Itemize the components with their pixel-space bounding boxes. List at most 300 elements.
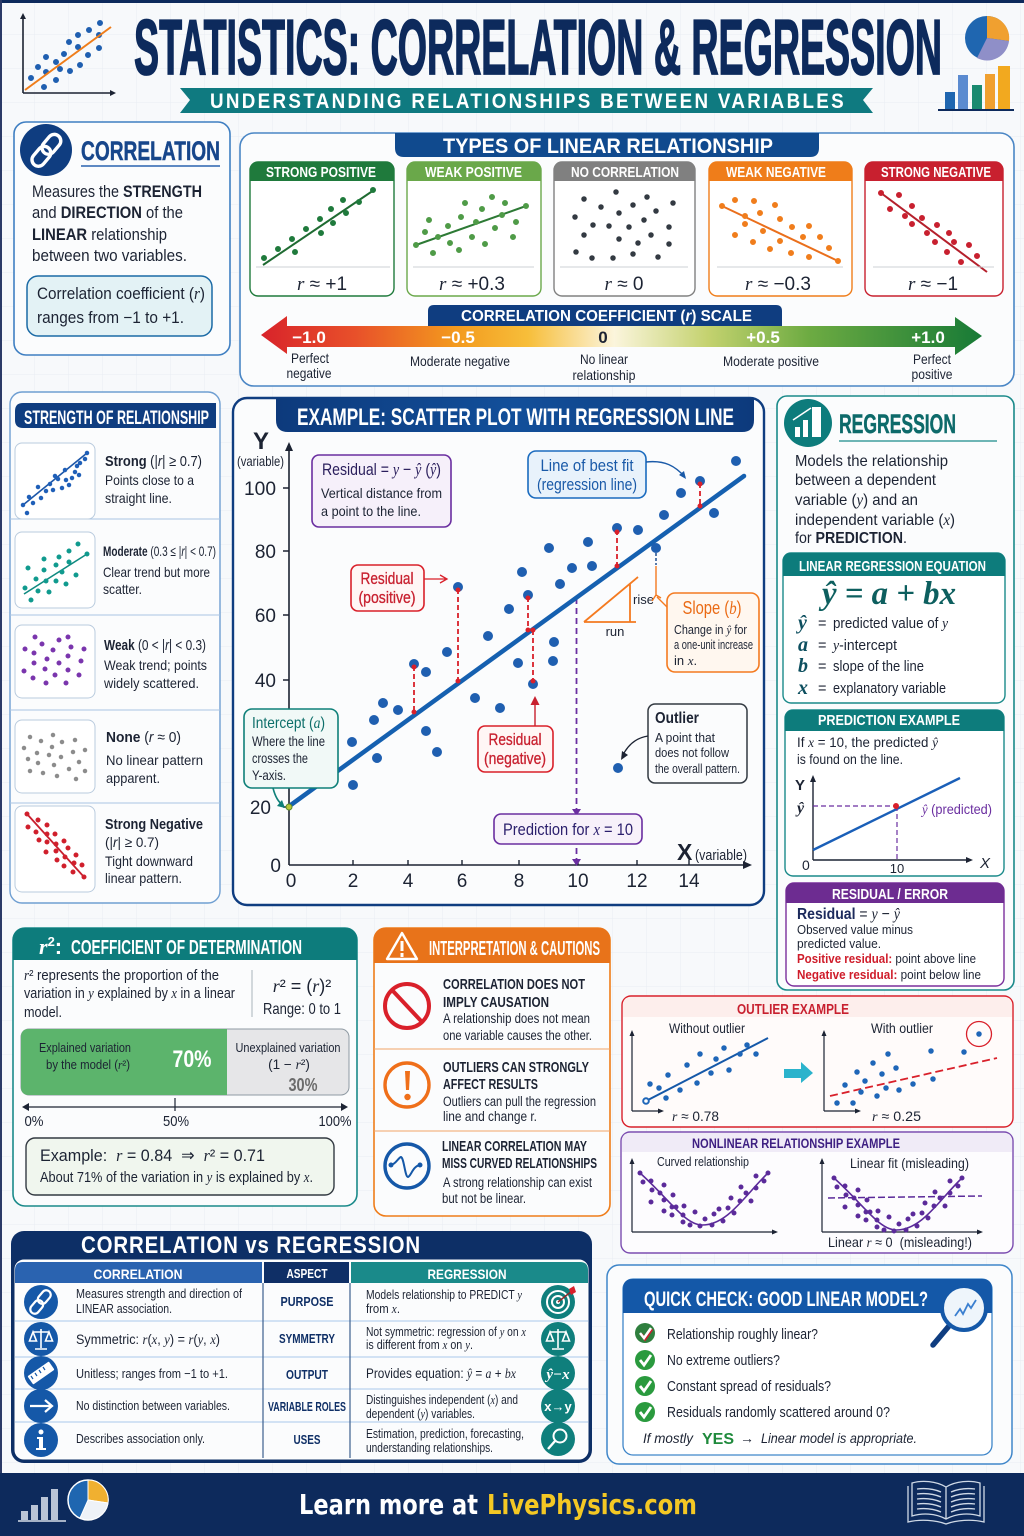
- card: weak negative: [709, 162, 852, 296]
- equation legend: =: [818, 659, 826, 675]
- heading: correlation vs regression: CORRELATION vs REGRESSION: [81, 1232, 421, 1259]
- callout: residual negative: [478, 696, 553, 772]
- table row: uses: [24, 1422, 575, 1457]
- chart axes: [237, 428, 752, 892]
- row: moderate: scatter.: [103, 581, 142, 597]
- chart axes: 14: [678, 871, 700, 892]
- mini prediction chart: [795, 775, 992, 876]
- chart: curved relationship: [630, 1154, 778, 1234]
- checklist: Relationship roughly linear?: [667, 1326, 818, 1343]
- conclusion line: YES: [702, 1431, 734, 1448]
- card: strong negative: r ≈ −1: [908, 274, 958, 295]
- callout: coefficient range: ranges from −1 to +1.: [37, 309, 184, 327]
- caution: outliers: Outliers can pull the regression: [443, 1094, 596, 1109]
- chart: curved relationship: Curved relationship: [657, 1154, 749, 1169]
- regression definition: [795, 453, 955, 547]
- row: weak: Weak trend; points: [104, 657, 207, 673]
- chart: without outlier: [630, 1021, 768, 1125]
- icon: open book: [908, 1481, 984, 1524]
- icon: magnifying glass: [933, 1286, 986, 1345]
- caution: outliers: OUTLIERS CAN STRONGLY: [443, 1059, 589, 1076]
- heading: types: TYPES OF LINEAR RELATIONSHIP: [443, 135, 773, 158]
- example box: [26, 1138, 334, 1195]
- mini prediction chart: ŷ (predicted): [920, 801, 992, 818]
- icon: arrow: [24, 1389, 58, 1423]
- card: strong positive: [250, 162, 394, 296]
- table row: uses: understanding relationships.: [366, 1441, 493, 1455]
- mini prediction chart: X: [979, 855, 991, 872]
- icon: header bar chart: [938, 66, 1014, 110]
- caution: causation: IMPLY CAUSATION: [443, 994, 549, 1011]
- checklist: Residuals randomly scattered around 0?: [667, 1404, 890, 1421]
- icon: ruler: [24, 1356, 58, 1390]
- correlation definition: LINEAR relationship: [32, 226, 167, 244]
- conclusion line: [643, 1430, 917, 1448]
- scale labels: Moderate positive: [723, 353, 819, 369]
- footer band: [0, 1473, 1024, 1536]
- footer call to action: LivePhysics.com: [487, 1488, 697, 1521]
- correlation definition: between two variables.: [32, 247, 187, 265]
- card: weak negative: WEAK NEGATIVE: [726, 165, 826, 181]
- heading: scatter plot: [276, 398, 754, 432]
- card: residual error: predicted value.: [797, 936, 881, 951]
- callout: outlier: A point that: [655, 730, 715, 745]
- callout: residual positive: (positive): [358, 588, 416, 607]
- heading: strength: STRENGTH OF RELATIONSHIP: [24, 408, 209, 429]
- chart axes: Y: [253, 428, 269, 455]
- row: none: None (r ≈ 0): [106, 729, 181, 746]
- r squared formula: r² = (r)²: [273, 976, 331, 996]
- heading: quick check: [623, 1279, 992, 1313]
- scale labels: positive: [912, 366, 953, 382]
- correlation scale arrow: +1.0: [911, 328, 945, 347]
- table row: variable roles: Distinguishes independent (x) and: [366, 1393, 518, 1407]
- icon: footer pie chart: [68, 1480, 108, 1520]
- heading: r squared: :: [55, 934, 62, 959]
- heading: r squared: 2: [48, 934, 55, 949]
- example box: About 71% of the variation in y is explained by x.: [40, 1169, 313, 1186]
- scale labels: negative: [286, 365, 332, 381]
- chart axes: (variable): [237, 453, 284, 469]
- slope triangle: rise: [633, 592, 654, 607]
- mini prediction chart: 0: [802, 857, 810, 873]
- caution: outliers: AFFECT RESULTS: [443, 1076, 538, 1093]
- r squared definition: r² represents the proportion of the: [24, 968, 219, 984]
- equation: ŷ = a + bx: [818, 576, 956, 612]
- callout: line of best fit: (regression line): [537, 475, 637, 494]
- table row: variable roles: No distinction between variables.: [76, 1398, 230, 1413]
- caution: causation: CORRELATION DOES NOT: [443, 976, 585, 993]
- panel: scatter plot example: [233, 398, 764, 905]
- callout: residual formula: a point to the line.: [321, 503, 421, 519]
- panel: quick check: [607, 1265, 1012, 1464]
- panel: outlier example: OUTLIER EXAMPLE: [737, 1002, 849, 1018]
- correlation scale arrow: −0.5: [441, 328, 475, 347]
- callout: residual formula: [312, 455, 451, 527]
- slope triangle: [584, 577, 654, 639]
- chart axes: 2: [348, 871, 358, 892]
- caution: causation: A relationship does not mean: [443, 1011, 590, 1026]
- correlation scale arrow: −1.0: [292, 328, 326, 347]
- arrow: without to with outlier: [784, 1062, 813, 1083]
- chart: with outlier: [822, 1021, 997, 1125]
- table row: purpose: Measures strength and direction of: [76, 1287, 242, 1301]
- icon: x to y: [541, 1389, 575, 1423]
- row: strong negative: (|r| ≥ 0.7): [105, 834, 159, 850]
- callout: residual negative: Residual: [488, 730, 542, 749]
- correlation definition: Measures the STRENGTH: [32, 183, 202, 201]
- chart axes: 60: [255, 606, 276, 627]
- mini prediction chart: 10: [890, 861, 904, 876]
- panel: outlier example: [622, 996, 1013, 1127]
- callout: slope: [652, 566, 759, 672]
- row: weak: [15, 625, 207, 698]
- equation legend: explanatory variable: [833, 681, 946, 697]
- row: weak: widely scattered.: [103, 675, 199, 691]
- stacked bar: explained vs unexplained: by the model (r²): [46, 1057, 130, 1072]
- subtitle ribbon: UNDERSTANDING RELATIONSHIPS BETWEEN VARIABLES: [210, 90, 846, 113]
- table row: variable roles: [24, 1389, 575, 1423]
- row: strong negative: linear pattern.: [105, 870, 182, 886]
- callout: line of best fit: [528, 451, 686, 498]
- residual lines: [414, 483, 700, 712]
- heading: coefficient scale: [428, 305, 782, 326]
- table row: output: OUTPUT: [286, 1368, 328, 1382]
- card: residual error: [786, 883, 1004, 986]
- table row: purpose: from x.: [366, 1302, 400, 1316]
- chart axes: 12: [626, 871, 648, 892]
- card: prediction example: [785, 710, 1004, 876]
- equation legend: a: [798, 634, 808, 656]
- panel: coefficient of determination: [13, 928, 357, 1206]
- caution: causation: one variable causes the other.: [443, 1028, 592, 1043]
- equation legend: slope of the line: [833, 659, 924, 675]
- stacked bar: explained vs unexplained: (1 − r²): [268, 1057, 310, 1072]
- row: weak: Weak (0 < |r| < 0.3): [104, 637, 206, 654]
- callout: slope: a one-unit increase: [674, 637, 753, 652]
- panel: types of linear relationship: [240, 133, 1014, 386]
- caution: curved relationships: but not be linear.: [442, 1191, 526, 1206]
- equation legend: b: [798, 655, 808, 677]
- icon: equation: [541, 1356, 575, 1390]
- caution: outliers: [385, 1059, 596, 1124]
- chart axes: 20: [250, 798, 271, 819]
- chart: without outlier: Without outlier: [669, 1021, 745, 1036]
- icon: bar chart: [784, 399, 832, 447]
- card: residual error: Negative residual: point below line: [797, 967, 981, 982]
- regression definition: Models the relationship: [795, 453, 948, 470]
- callout: slope: in x.: [674, 653, 697, 668]
- row: strong negative: Tight downward: [105, 853, 193, 869]
- r squared definition: [24, 968, 235, 1021]
- chart: with outlier: r ≈ 0.25: [872, 1108, 921, 1125]
- callout: coefficient range: [27, 276, 212, 336]
- callout: intercept: crosses the: [252, 750, 308, 766]
- equation legend: predicted value of y: [833, 616, 949, 632]
- table row: symmetry: Symmetric: r(x, y) = r(y, x): [76, 1332, 220, 1347]
- icon: equation: ŷ−x: [544, 1367, 570, 1383]
- regression definition: independent variable (x): [795, 512, 955, 529]
- callout: outlier: Outlier: [655, 710, 699, 727]
- panel: correlation: [14, 122, 230, 355]
- equation legend: x: [797, 677, 808, 699]
- scale labels: Perfect: [913, 351, 951, 367]
- panel: interpretation and cautions: [374, 928, 610, 1216]
- table row: purpose: [24, 1285, 576, 1319]
- icon: curve: [385, 1144, 429, 1188]
- card: strong negative: STRONG NEGATIVE: [881, 165, 991, 181]
- callout: residual positive: Residual: [360, 569, 414, 588]
- row: strong: [15, 443, 202, 519]
- card: residual error: Residual = y − ŷ: [797, 906, 901, 923]
- conclusion line: If mostly: [643, 1430, 694, 1446]
- card: residual error: Positive residual: point above line: [797, 951, 976, 966]
- icon: scales: [24, 1322, 58, 1356]
- callout: slope: Slope (b): [682, 598, 742, 618]
- row: strong: Points close to a: [105, 472, 194, 488]
- chart axes: 6: [457, 871, 467, 892]
- stacked bar: explained vs unexplained: 30%: [288, 1075, 318, 1095]
- table row: symmetry: [24, 1322, 575, 1356]
- table row: symmetry: SYMMETRY: [279, 1332, 336, 1346]
- equation legend: y-intercept: [831, 638, 897, 654]
- icon: target: [541, 1285, 576, 1319]
- card: no correlation: [554, 162, 695, 296]
- panel: nonlinear relationship example: NONLINEAR RELATIONSHIP EXAMPLE: [692, 1136, 900, 1151]
- card: no correlation: NO CORRELATION: [571, 165, 679, 181]
- heading: regression: REGRESSION: [839, 409, 956, 439]
- r squared formula: Range: 0 to 1: [263, 1001, 341, 1018]
- card: prediction example: is found on the line.: [797, 751, 903, 767]
- card: strong negative: [865, 162, 1003, 296]
- icon: link: [24, 1285, 58, 1319]
- table row: output: [24, 1356, 575, 1390]
- row: strong negative: Strong Negative: [105, 816, 203, 833]
- regression definition: variable (y) and an: [795, 492, 918, 509]
- table row: uses: Describes association only.: [76, 1431, 205, 1446]
- heading: r squared: COEFFICIENT OF DETERMINATION: [71, 937, 302, 959]
- heading: scatter plot: EXAMPLE: SCATTER PLOT WITH REGRESSION LINE: [297, 404, 734, 431]
- chart axes: 0: [270, 856, 281, 877]
- chart axes: 8: [514, 871, 524, 892]
- panel: nonlinear relationship example: [621, 1132, 1013, 1253]
- chart axes: 10: [567, 871, 589, 892]
- card: residual error: Observed value minus: [797, 922, 913, 937]
- table row: output: Unitless; ranges from −1 to +1.: [76, 1366, 228, 1381]
- correlation definition: and DIRECTION of the: [32, 204, 183, 222]
- correlation scale arrow: 0: [598, 328, 608, 347]
- scale labels: [286, 350, 953, 383]
- table row: purpose: Models relationship to PREDICT y: [366, 1288, 522, 1302]
- table row: purpose: PURPOSE: [280, 1295, 334, 1309]
- callout: prediction for x=10: Prediction for x = 10: [503, 820, 633, 839]
- table row: symmetry: is different from x on y.: [366, 1338, 473, 1352]
- callout: line of best fit: Line of best fit: [540, 456, 634, 475]
- card: linear regression equation: [783, 553, 1005, 703]
- icon: exclamation: [385, 1063, 429, 1107]
- scale labels: Perfect: [291, 350, 329, 366]
- regression definition: for PREDICTION.: [795, 530, 907, 547]
- table row: uses: Estimation, prediction, forecasting,: [366, 1427, 524, 1441]
- data points: [352, 461, 736, 785]
- heading: cautions: [374, 928, 610, 963]
- icon: header pie chart: [965, 16, 1009, 60]
- table row: variable roles: dependent (y) variables.: [366, 1407, 475, 1421]
- callout: residual negative: (negative): [484, 749, 546, 768]
- card: residual error: RESIDUAL / ERROR: [832, 887, 948, 903]
- heading: r squared: r: [39, 934, 48, 959]
- icon: scales teal: [541, 1322, 575, 1356]
- row: strong: Strong (|r| ≥ 0.7): [105, 453, 202, 470]
- card: prediction example: If x = 10, the predicted ŷ: [797, 734, 939, 751]
- callout: intercept: [244, 709, 338, 810]
- icon: prohibition sign: [385, 984, 429, 1028]
- panel: strength of relationship: [10, 392, 220, 903]
- card: weak positive: r ≈ +0.3: [439, 274, 505, 295]
- equation legend: =: [818, 616, 826, 632]
- callout: residual formula: Residual = y − ŷ (ŷ): [322, 460, 441, 479]
- table header row: ASPECT: [286, 1267, 328, 1281]
- callout: outlier: [621, 704, 747, 783]
- card: prediction example: PREDICTION EXAMPLE: [818, 712, 960, 729]
- callout: residual positive: [351, 565, 447, 611]
- correlation scale arrow: [261, 316, 982, 355]
- card: weak positive: [407, 162, 541, 296]
- chart: linear fit misleading: Linear r ≈ 0 (misleading!): [828, 1234, 972, 1251]
- checklist: Constant spread of residuals?: [667, 1378, 831, 1395]
- r squared definition: variation in y explained by x in a linear: [24, 986, 235, 1002]
- callout: outlier: does not follow: [655, 745, 730, 760]
- caution: curved relationships: [385, 1138, 597, 1206]
- caution: curved relationships: LINEAR CORRELATION MAY: [442, 1138, 587, 1155]
- stacked bar: explained vs unexplained: Unexplained variation: [236, 1040, 340, 1055]
- caution: curved relationships: MISS CURVED RELATIONSHIPS: [442, 1155, 597, 1172]
- regression definition: between a dependent: [795, 472, 937, 489]
- chart axes: 80: [255, 542, 276, 563]
- heading: cautions: INTERPRETATION & CAUTIONS: [429, 938, 600, 960]
- slope triangle: run: [606, 624, 624, 639]
- chart axes: 40: [255, 671, 276, 692]
- chart axes: 0: [286, 871, 296, 892]
- callout: coefficient range: Correlation coefficient (r): [37, 284, 205, 303]
- chart axes: (variable): [695, 847, 747, 864]
- callout: intercept: Y-axis.: [252, 767, 286, 783]
- r squared formula: [263, 976, 341, 1018]
- prediction guide line: [572, 598, 581, 866]
- chart axes: 100: [244, 479, 276, 500]
- stacked bar: explained vs unexplained: Explained variation: [39, 1040, 131, 1055]
- stacked bar: explained vs unexplained: 70%: [172, 1046, 212, 1073]
- table row: symmetry: Not symmetric: regression of y on x: [366, 1325, 526, 1339]
- chart: linear fit misleading: Linear fit (misleading): [850, 1156, 969, 1171]
- scale labels: No linear: [580, 351, 628, 367]
- callout: residual formula: Vertical distance from: [321, 485, 442, 501]
- callout: intercept: Intercept (a): [252, 715, 325, 732]
- card: strong positive: STRONG POSITIVE: [266, 165, 376, 181]
- caution: causation: [385, 976, 592, 1043]
- card: strong positive: r ≈ +1: [297, 274, 347, 295]
- icon: chain link: [20, 124, 72, 176]
- row: strong: straight line.: [105, 490, 172, 506]
- row: moderate: Moderate (0.3 ≤ |r| < 0.7): [103, 543, 216, 559]
- equation legend: =: [818, 638, 826, 654]
- table header row: REGRESSION: [428, 1266, 506, 1282]
- chart axes: X: [677, 839, 693, 865]
- caution: outliers: line and change r.: [443, 1109, 537, 1124]
- percent axis: [22, 1098, 352, 1130]
- caution: curved relationships: A strong relationship can exist: [443, 1175, 592, 1190]
- mini prediction chart: Y: [795, 777, 805, 794]
- table header row: CORRELATION: [94, 1266, 182, 1282]
- icon: footer bar chart: [18, 1489, 66, 1521]
- callout: prediction for x=10: [494, 814, 642, 844]
- correlation scale arrow: +0.5: [746, 328, 780, 347]
- card: no correlation: r ≈ 0: [605, 274, 643, 295]
- chart axes: 4: [403, 871, 414, 892]
- checklist: No extreme outliers?: [667, 1352, 780, 1369]
- equation legend: ŷ: [796, 612, 807, 634]
- chart: without outlier: r ≈ 0.78: [672, 1108, 719, 1125]
- equation legend: [796, 612, 949, 699]
- conclusion line: Linear model is appropriate.: [761, 1430, 917, 1446]
- panel: correlation vs regression table: [11, 1231, 592, 1463]
- equation legend: =: [818, 681, 826, 697]
- callout: intercept: Where the line: [252, 733, 325, 749]
- percent axis: 50%: [163, 1113, 189, 1130]
- footer call to action: Learn more at: [299, 1488, 478, 1521]
- conclusion line: →: [740, 1430, 754, 1446]
- stacked bar: explained vs unexplained: [21, 1029, 349, 1095]
- heading: r squared: [13, 928, 357, 960]
- icon: x to y: x→y: [544, 1399, 572, 1414]
- icon: header scatter plot: [20, 13, 116, 96]
- callout: outlier: the overall pattern.: [655, 761, 740, 776]
- chart: linear fit misleading: [820, 1156, 983, 1251]
- heading: strength: [15, 403, 216, 429]
- table header row: [15, 1262, 588, 1283]
- checklist: [635, 1323, 890, 1422]
- percent axis: 0%: [24, 1113, 44, 1130]
- table row: output: Provides equation: ŷ = a + bx: [366, 1366, 516, 1381]
- example box: Example: r = 0.84 ⇒ r² = 0.71: [40, 1146, 265, 1165]
- icon: info: [24, 1423, 58, 1457]
- row: none: No linear pattern: [106, 752, 203, 768]
- panel: regression: [777, 396, 1014, 990]
- r squared definition: model.: [24, 1005, 62, 1021]
- heading: coefficient scale: CORRELATION COEFFICIENT (r) SCALE: [461, 308, 752, 325]
- table row: uses: USES: [294, 1433, 320, 1447]
- row: none: [15, 720, 203, 793]
- percent axis: 100%: [318, 1113, 352, 1130]
- heading: correlation: CORRELATION: [81, 136, 220, 166]
- mini prediction chart: ŷ: [795, 800, 805, 817]
- table row: purpose: LINEAR association.: [76, 1302, 172, 1316]
- footer call to action: [299, 1488, 697, 1521]
- card: weak positive: WEAK POSITIVE: [425, 165, 522, 181]
- row: none: apparent.: [106, 770, 160, 786]
- chart: with outlier: With outlier: [871, 1021, 933, 1036]
- callout: slope: Change in ŷ for: [674, 622, 748, 637]
- regression line: [288, 476, 744, 807]
- correlation definition: [32, 183, 202, 265]
- scale labels: relationship: [572, 367, 636, 383]
- row: strong negative: [15, 806, 203, 892]
- card: weak negative: r ≈ −0.3: [745, 274, 811, 295]
- table row: variable roles: VARIABLE ROLES: [268, 1400, 346, 1414]
- row: moderate: Clear trend but more: [103, 564, 210, 580]
- icon: magnifier: [541, 1422, 575, 1456]
- scale labels: Moderate negative: [410, 353, 510, 369]
